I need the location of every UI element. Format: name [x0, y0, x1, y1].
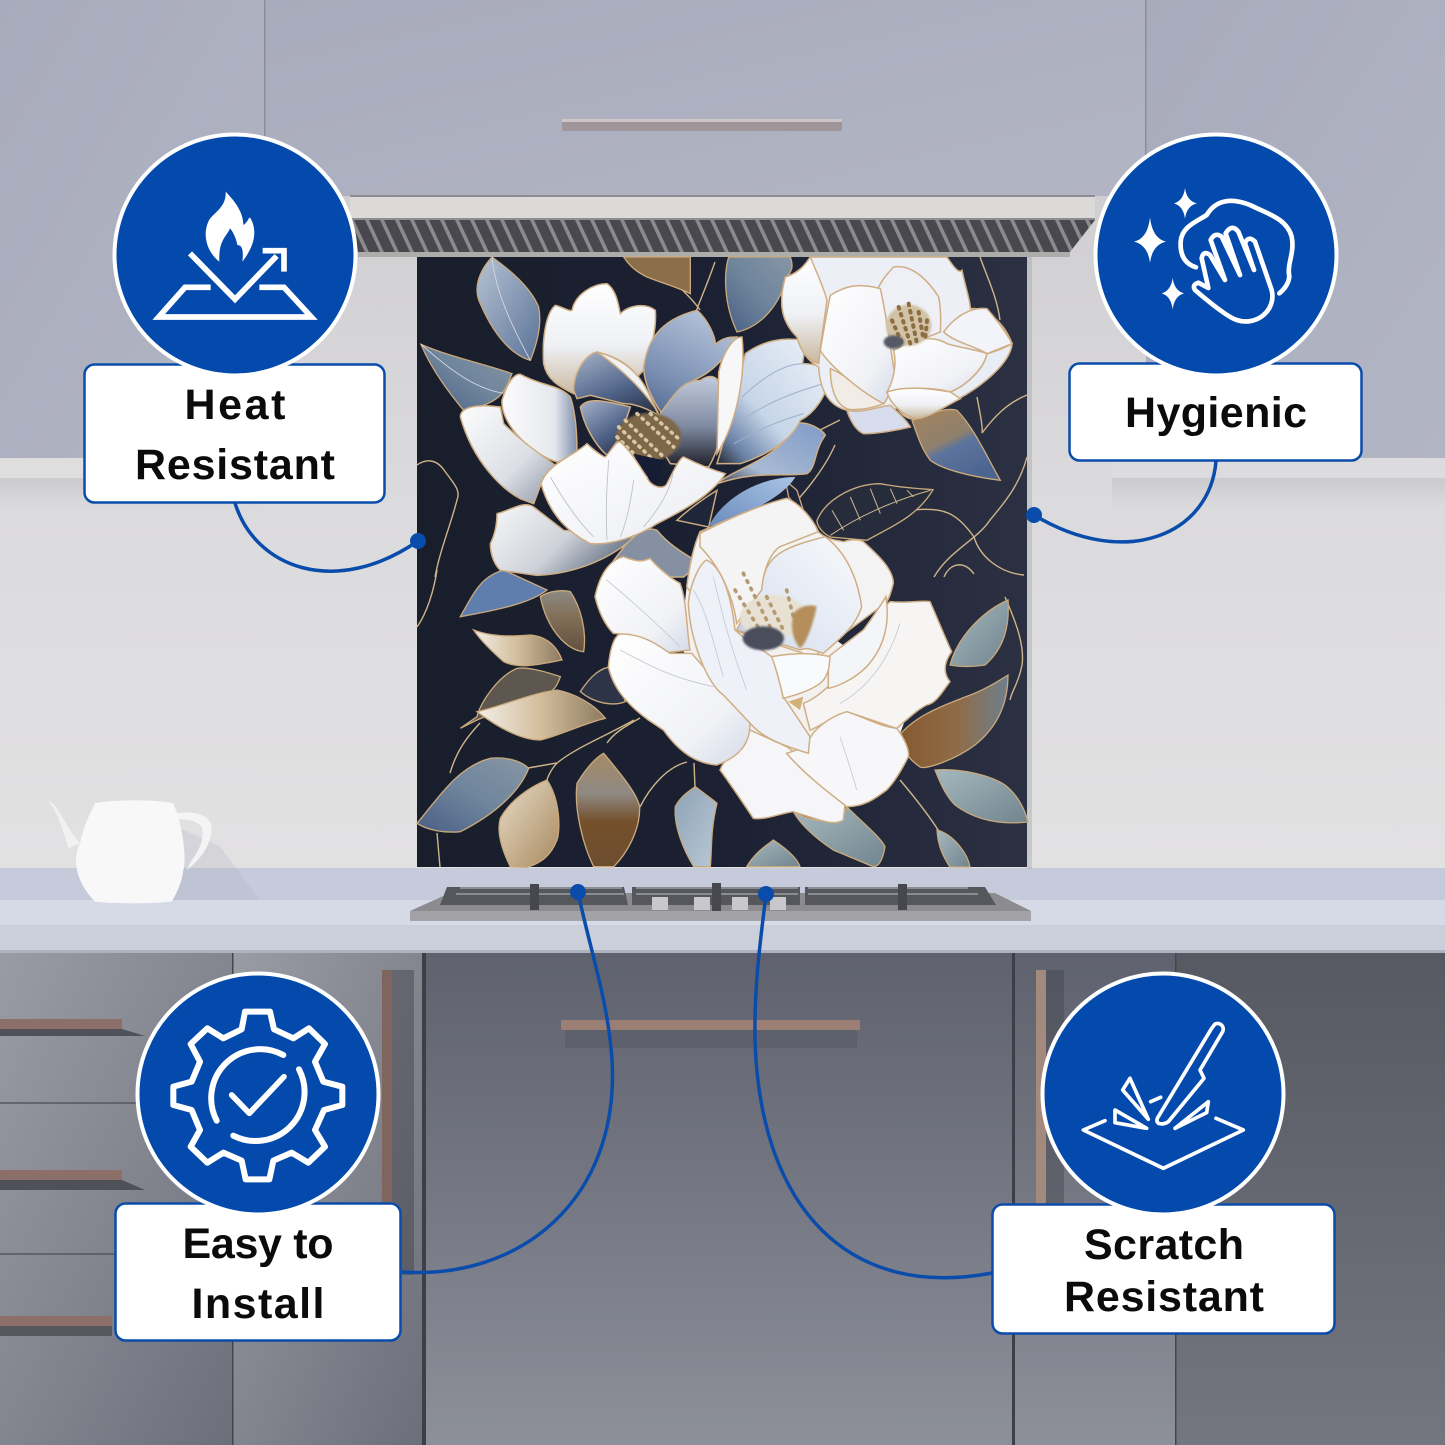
flower: upper left: [460, 284, 743, 577]
heading: scratch resistant: Resistant: [1064, 1273, 1264, 1321]
label box: [84, 364, 384, 502]
anchor dot: [570, 884, 586, 900]
heading: easy to install: Install: [192, 1280, 324, 1328]
stamen: lower centre: [735, 573, 817, 710]
gold vine lines: [417, 257, 1027, 867]
flower: upper left, outer right petals: [717, 339, 830, 484]
heading: easy to install: Easy to: [182, 1220, 334, 1268]
icon badge: [1096, 134, 1336, 376]
flower: lower centre: [595, 498, 952, 823]
icon: flame on surface: [159, 192, 311, 317]
panel: floral glass splashback: [417, 257, 1032, 869]
connector: [755, 894, 992, 1278]
label box: [992, 1204, 1334, 1334]
label box: [1070, 364, 1362, 460]
callout: scratch resistant: [755, 886, 1334, 1334]
icon badge: [138, 974, 378, 1214]
heading: easy to install: [182, 1220, 334, 1328]
anchor dot: [410, 533, 426, 549]
label box: [116, 1204, 400, 1340]
callout: hygienic: [1026, 134, 1362, 542]
leaves: [417, 257, 1028, 867]
callout: easy to install: [116, 884, 612, 1340]
connector: [235, 503, 418, 571]
connector: [402, 892, 612, 1273]
callout: heat resistant: [84, 134, 426, 571]
anchor dot: [1026, 507, 1042, 523]
anchor dot: [758, 886, 774, 902]
icon: gear with check: [173, 1012, 342, 1179]
teapot: [48, 800, 260, 903]
icon: knife scratching surface: [1083, 1023, 1243, 1168]
icon badge: [1042, 974, 1284, 1214]
flower: upper right: [782, 257, 1012, 434]
icon: wiping hand and sparkles: [1134, 188, 1292, 321]
gas hob: [410, 883, 1031, 921]
heading: hygienic: Hygienic: [1125, 389, 1307, 437]
heading: heat resistant: [135, 381, 335, 489]
front petal: upper left: [541, 442, 795, 544]
connector: [1034, 461, 1216, 542]
icon badge: [114, 134, 356, 376]
heading: heat resistant: Heat: [184, 381, 286, 429]
stamen: upper left: [616, 413, 681, 487]
heading: scratch resistant: Scratch: [1084, 1221, 1244, 1269]
heading: scratch resistant: [1064, 1221, 1264, 1321]
stamen: upper right: [884, 304, 931, 349]
heading: heat resistant: Resistant: [135, 441, 335, 489]
